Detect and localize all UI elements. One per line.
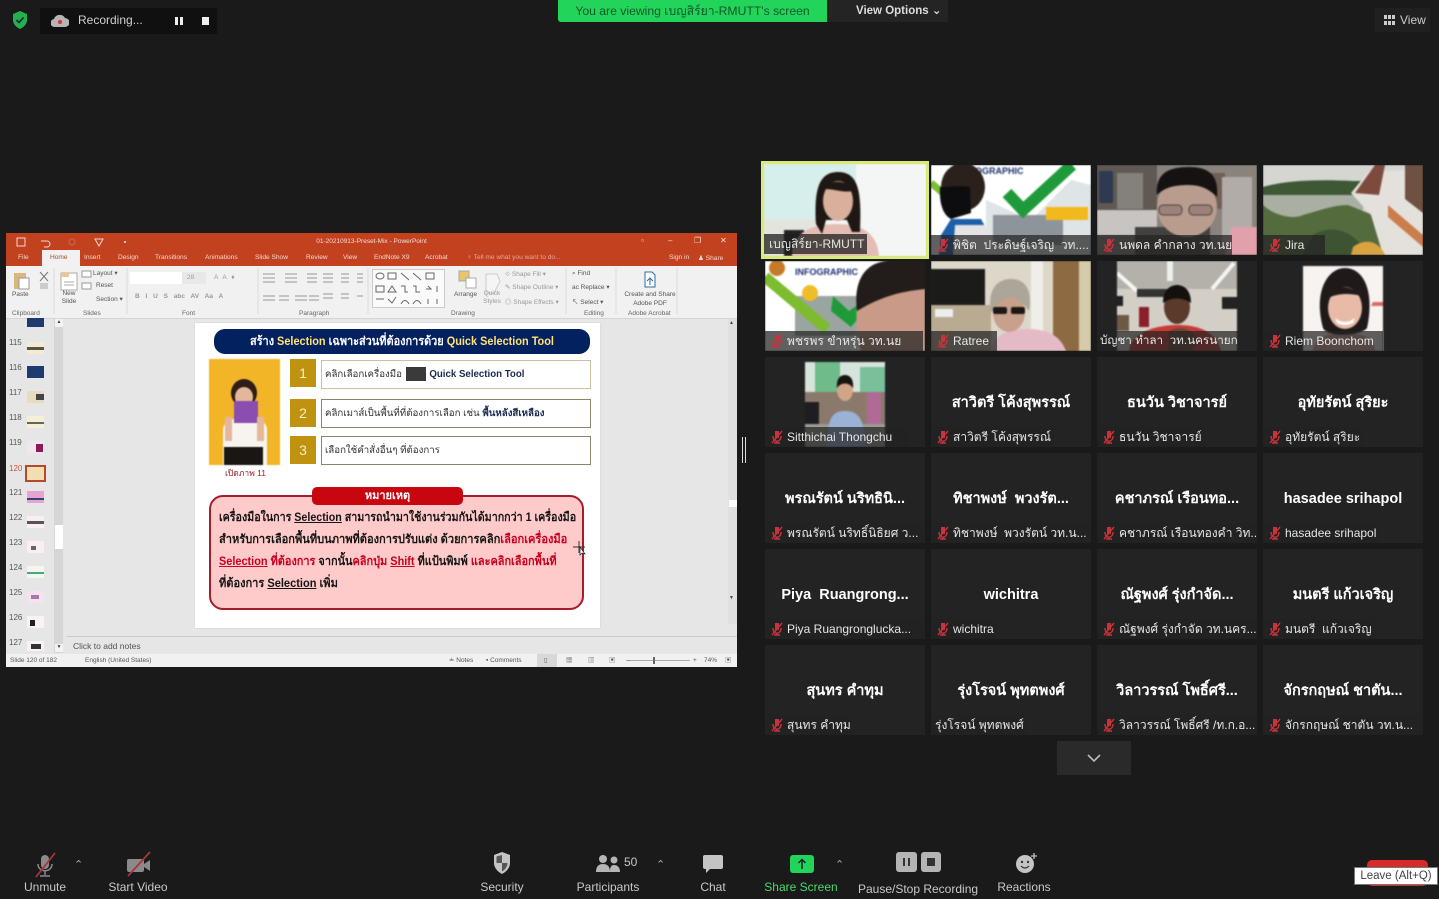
slide thumbnail pane: 118 [9, 413, 22, 422]
name label: Sitthichai Thongchu [787, 430, 892, 444]
toolbar: security button: Security [480, 880, 524, 894]
notes bar [66, 636, 737, 654]
ribbon: ⟐ Shape Fill ▾ [505, 271, 546, 278]
slide thumbnail pane: 123 [9, 538, 22, 547]
PowerPoint title bar: Sign in [669, 254, 689, 261]
slide: คลิกเลือกเครื่องมือ Quick Selection Tool [325, 369, 524, 380]
ribbon: Editing [584, 310, 604, 317]
participant tile: คชาภรณ์ เรือนทอ... [1115, 491, 1239, 507]
slide thumbnail pane: 125 [9, 588, 22, 597]
ribbon: Section ▾ [96, 296, 123, 303]
paragraph group [263, 273, 363, 301]
participant tile: พรณรัตน์ นริทธิ์นิธิยศ ว... [787, 526, 918, 540]
participant tile: ธนวัน วิชาจารย์ [1127, 395, 1227, 411]
slide: เลือกใช้คำสั่งอื่นๆ ที่ต้องการ [325, 445, 440, 456]
participant tile [931, 453, 1091, 543]
recording indicator: Recording... [78, 13, 143, 27]
slide thumbnail pane: 127 [9, 638, 22, 647]
ribbon: Font [182, 310, 195, 317]
ribbon: B I U S abc AV Aa A [135, 293, 223, 300]
toolbar: participants button: ⌃ [656, 859, 665, 871]
slide thumbnail pane [6, 319, 66, 654]
participant: Ratree [931, 261, 1091, 351]
toolbar: chat button: Chat [700, 880, 726, 894]
next page chevron button [1057, 741, 1131, 775]
photo caption: เปิดภาพ 11 [225, 468, 266, 478]
slide thumbnail pane: 120 [9, 464, 22, 473]
name label: Riem Boonchom [1285, 334, 1374, 348]
toolbar: unmute button [24, 852, 66, 894]
PowerPoint title bar: Transitions [155, 254, 187, 261]
toolbar: share screen button: Share Screen [764, 880, 838, 894]
ribbon: ↖ Select ▾ [572, 299, 603, 306]
slide thumbnail pane: ▼ [57, 644, 61, 650]
ribbon: A A ♦ [214, 274, 235, 281]
leave tooltip [1354, 867, 1438, 885]
participant: Riem Boonchom [1263, 261, 1423, 351]
ribbon: Arrange [454, 291, 477, 298]
view layout button: View [1400, 13, 1426, 27]
participant: man in red [1097, 261, 1257, 351]
font group [130, 272, 182, 284]
ribbon: ◎ Shape Effects ▾ [505, 299, 559, 306]
participant tile [765, 453, 925, 543]
step 3: 3 [299, 442, 307, 458]
viewing banner [558, 0, 827, 22]
PowerPoint title bar: ♟ Share [698, 255, 723, 262]
participant tile: รุ่งโรจน์ พุทตพงศ์ [957, 683, 1065, 699]
step 1 [290, 359, 316, 387]
name label [764, 234, 867, 254]
participant tile: Piya Ruangronglucka... [787, 622, 911, 636]
participant tile [931, 645, 1091, 735]
PowerPoint title bar: Review [306, 254, 328, 261]
participant tile: รุ่งโรจน์ พุทตพงศ์ [935, 718, 1024, 732]
slide title pill [214, 329, 590, 354]
toolbar: reactions button [997, 853, 1051, 894]
slide thumbnail pane: 126 [9, 613, 22, 622]
name label [1097, 235, 1232, 255]
participant tile [1097, 645, 1257, 735]
participant tile [1263, 357, 1423, 447]
thumbnail scrollbar [54, 318, 63, 653]
participant tile [1263, 549, 1423, 639]
note label: หมายเหตุ [365, 490, 410, 502]
participant tile: มนตรี แก้วเจริญ [1285, 622, 1372, 636]
ribbon: ✎ Shape Outline ▾ [505, 284, 559, 291]
name label: พชรพร ขำหรุ่น วท.นย [787, 334, 901, 348]
participant: boy in room [1097, 165, 1257, 255]
PowerPoint title bar: Slide Show [255, 254, 288, 261]
slide scrollbar [728, 319, 737, 624]
toolbar: chat button [700, 855, 726, 894]
slide thumbnail pane: 119 [9, 438, 22, 447]
quick access icons [16, 238, 126, 248]
slide thumbnail pane: 117 [9, 388, 22, 397]
toolbar: share screen button: ⌃ [835, 859, 844, 871]
participant: Sitthichai [765, 357, 925, 447]
ribbon [6, 266, 737, 319]
editing group: ⌕ Find [572, 270, 590, 277]
participant tile: ทิชาพงษ์ พวงรัต... [953, 491, 1069, 507]
status bar [6, 654, 737, 667]
slide title pill: สร้าง Selection เฉพาะส่วนที่ต้องการด้วย Quick Selection Tool [250, 334, 554, 348]
slide thumbnail pane: 124 [9, 563, 22, 572]
status bar: ≐ Notes [449, 657, 473, 664]
mouse cursor [573, 541, 586, 556]
status bar: + [693, 657, 697, 664]
step 2: 2 [299, 405, 307, 421]
toolbar: share screen button [764, 855, 844, 894]
window controls: – [668, 236, 672, 245]
participant: person with infographic: INFOGRAPHIC [795, 267, 859, 277]
clipboard group: Paste [12, 291, 29, 298]
unmute caret: ⌃ [74, 859, 83, 871]
participant tile: hasadee srihapol [1284, 491, 1402, 507]
status bar: Slide 120 of 182 [10, 657, 57, 664]
participant: masked presenter: OGRAPHIC [975, 166, 1024, 176]
name label [765, 331, 923, 351]
drawing group [372, 269, 445, 308]
ribbon separators [54, 268, 678, 314]
name label: พิชิต ประดิษฐ์เจริญ วท.... [953, 238, 1089, 252]
name label: นพดล คำกลาง วท.นย [1119, 238, 1232, 252]
security shield icon [13, 11, 27, 29]
slide thumbnail pane: 122 [9, 513, 22, 522]
slide: คลิกเมาส์เป็นพื้นที่ที่ต้องการเลือก เช่น พื้นหลังสีเหลือง [325, 408, 545, 419]
toolbar: unmute button: Unmute [24, 880, 66, 894]
ribbon: 28 [187, 274, 194, 281]
status bar: ▣ [609, 657, 616, 664]
slide photo of student [208, 358, 281, 466]
participant tile [1097, 357, 1257, 447]
ribbon: New Slide [62, 290, 76, 305]
status bar: – [626, 657, 630, 664]
panel splitter [742, 437, 746, 463]
PowerPoint title bar: Design [118, 254, 139, 261]
ribbon: Adobe Acrobat [628, 310, 671, 317]
participant tile: ธนวัน วิชาจารย์ [1119, 430, 1202, 444]
toolbar: security button [480, 852, 524, 894]
toolbar: start video button [108, 851, 168, 894]
participant tile: ณัฐพงศ์ รุ่งกำจัด วท.นคร... [1119, 622, 1257, 636]
window title: 01-20210913-Preset-Mix - PowerPoint [316, 238, 427, 245]
participant tile: มนตรี แก้วเจริญ [1293, 587, 1393, 603]
window controls: ▫ [641, 236, 644, 245]
view options button [827, 0, 948, 22]
participant tile: วิลาวรรณ์ โพธิ์ศรี... [1116, 683, 1238, 699]
note box: เครื่องมือในการ Selection สามารถนำมาใช้งานร่วมกันได้มากกว่า 1 เครื่องมือ [219, 510, 576, 524]
slide thumbnail pane: 116 [9, 363, 22, 372]
step 2 [290, 399, 316, 427]
participant tile [765, 645, 925, 735]
status bar: ▣ [725, 657, 732, 664]
slides group [60, 270, 92, 290]
participant tile: ณัฐพงศ์ รุ่งกำจัด... [1120, 587, 1234, 603]
panel: shared PowerPoint window [6, 233, 737, 667]
PowerPoint title bar: View [343, 254, 357, 261]
window controls: ❐ [694, 236, 701, 245]
window controls [641, 236, 727, 245]
participant tile: สุนทร คำทุม [787, 718, 851, 732]
participant tile [931, 549, 1091, 639]
ribbon: Create and Share Adobe PDF [624, 291, 676, 307]
participant: Jira landscape [1263, 165, 1423, 255]
PowerPoint title bar: File [18, 254, 29, 261]
participant tile [1097, 453, 1257, 543]
PowerPoint title bar: Home [50, 254, 68, 261]
name label [1263, 235, 1325, 255]
leave button [1367, 860, 1428, 886]
name label: Ratree [953, 334, 989, 348]
PowerPoint title bar: ♀ Tell me what you want to do... [467, 254, 561, 261]
ribbon: Drawing [451, 310, 475, 317]
PowerPoint title bar: Insert [84, 254, 100, 261]
recording indicator [40, 8, 217, 34]
participant tile: สาวิตรี โค้งสุพรรณ์ [953, 430, 1051, 444]
participant tile: อุทัยรัตน์ สุริยะ [1285, 430, 1360, 444]
note box: ที่ต้องการ Selection เพิ่ม [219, 576, 338, 590]
slide thumbnail pane: 115 [9, 338, 22, 347]
PowerPoint title bar [6, 233, 737, 266]
note box: สำหรับการเลือกพื้นที่บนภาพที่ต้องการปรับแต่ง ด้วยการคลิกเลือกเครื่องมือ [219, 532, 567, 546]
PowerPoint title bar: EndNote X9 [374, 254, 410, 261]
participant: person with infographic [765, 261, 925, 351]
participant: masked presenter [931, 165, 1091, 255]
toolbar: reactions button: Reactions [997, 880, 1051, 894]
participant: active speaker [761, 161, 929, 259]
toolbar: pause stop recording button: Pause/Stop Recording [858, 882, 978, 896]
adobe pdf group [644, 272, 656, 288]
participant tile: wichitra [984, 587, 1038, 603]
slide scrollbar: ▼ [729, 595, 734, 601]
participant tile: สุนทร คำทุม [806, 683, 884, 699]
name label [1097, 331, 1239, 351]
view layout button [1375, 8, 1430, 32]
participant tile: อุทัยรัตน์ สุริยะ [1298, 395, 1388, 411]
name label [931, 235, 1091, 255]
name label [1263, 331, 1383, 351]
participant tile: wichitra [953, 622, 994, 636]
note label [312, 487, 463, 505]
status bar: ▯ [544, 657, 548, 664]
participant tile [765, 549, 925, 639]
name label: บัญชา ทำลา วท.นครนายก [1100, 334, 1238, 347]
participant tile: ทิชาพงษ์ พวงรัตน์ วท.น... [953, 526, 1087, 540]
participant tile: Piya Ruangrong... [781, 587, 909, 603]
note box: Selection ที่ต้องการ จากนั้นคลิกปุ่ม Shift ที่แป้นพิมพ์ และคลิกเลือกพื้นที่ [219, 554, 557, 568]
participant tile [1263, 645, 1423, 735]
participant tile [931, 357, 1091, 447]
PowerPoint title bar: Animations [205, 254, 238, 261]
participant tile: จักรกฤษณ์ ชาตัน... [1283, 683, 1403, 699]
ribbon: ac Replace ▾ [572, 284, 610, 291]
step 3 [290, 436, 316, 464]
slide [195, 323, 600, 628]
participant tile: จักรกฤษณ์ ชาตัน วท.น... [1285, 718, 1413, 732]
ribbon: Reset [96, 282, 113, 289]
leave tooltip: Leave (Alt+Q) [1360, 870, 1432, 882]
toolbar: participants button [577, 855, 665, 894]
ribbon tabs [42, 250, 80, 266]
toolbar: participants button: Participants [577, 880, 639, 894]
toolbar: pause stop recording button [858, 852, 978, 896]
viewing banner: You are viewing เบญสิร์ยา-RMUTT's screen [575, 4, 810, 18]
step 1: 1 [299, 365, 307, 381]
ribbon: Slides [83, 310, 101, 317]
status bar: English (United States) [85, 657, 151, 664]
slide scrollbar: ▲ [729, 320, 734, 326]
status bar: 74% [704, 657, 717, 664]
participant tile [1097, 549, 1257, 639]
ribbon: Clipboard [12, 310, 40, 317]
name label [931, 331, 997, 351]
window controls: ✕ [720, 236, 727, 245]
status bar: ▥ [588, 657, 594, 664]
ribbon: Layout ▾ [93, 270, 118, 277]
view options button: View Options ⌄ [856, 5, 941, 17]
ribbon: Quick Styles [483, 290, 501, 305]
slide thumbnail pane: 121 [9, 488, 22, 497]
name label [765, 427, 908, 447]
status bar: ▪ Comments [486, 657, 522, 664]
notes bar: Click to add notes [73, 641, 141, 651]
status bar: ▦ [566, 657, 572, 664]
slide thumbnail pane: ▲ [57, 319, 61, 325]
participant tile: สาวิตรี โค้งสุพรรณ์ [952, 395, 1070, 411]
note box [209, 495, 584, 610]
participant tile: hasadee srihapol [1285, 526, 1376, 540]
participant tile: คชาภรณ์ เรือนทองคำ วิท... [1119, 526, 1257, 540]
toolbar: start video button: Start Video [108, 880, 168, 894]
PowerPoint title bar: Acrobat [425, 254, 448, 261]
ribbon: Paragraph [299, 310, 329, 317]
participant tile: วิลาวรรณ์ โพธิ์ศรี /ท.ก.อ... [1119, 718, 1255, 732]
name label: เบญสิร์ยา-RMUTT [769, 237, 864, 251]
participant tile: พรณรัตน์ นริทธินิ... [785, 491, 905, 507]
name label: Jira [1285, 238, 1304, 252]
participant tile [1263, 453, 1423, 543]
toolbar: participants button: 50 [624, 855, 637, 869]
